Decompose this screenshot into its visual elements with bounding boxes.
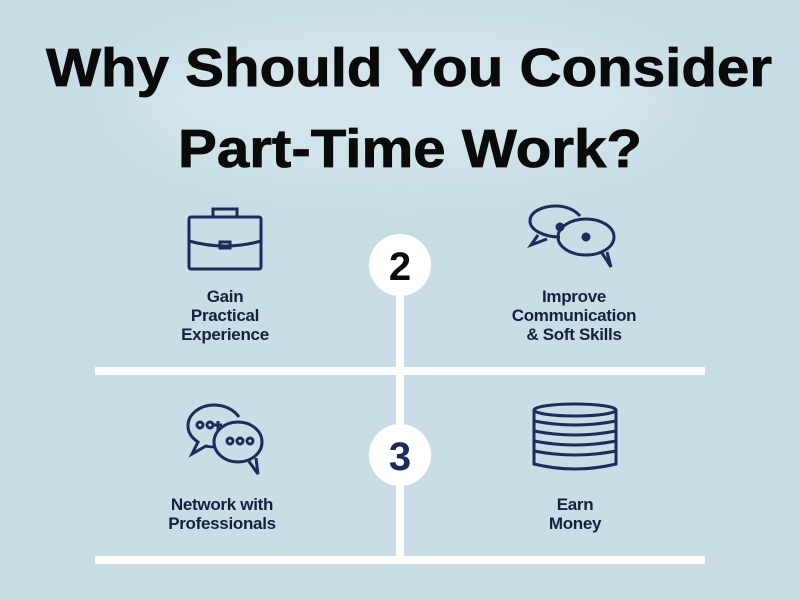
label: improve communication: & Soft Skills [526,325,622,344]
label: earn money [549,495,602,533]
label: network with professionals [168,495,276,533]
label: gain practical experience [181,287,269,344]
label: earn money: Money [549,514,601,533]
number 2: 2 [389,245,411,289]
label: network with professionals: Network with [171,495,273,514]
background glow [120,20,680,180]
number 3 [369,424,431,486]
icon: network chat [186,404,264,475]
label: earn money: Earn [557,495,593,514]
title: Part-Time Work? [178,119,642,179]
label: improve communication: Improve [542,287,606,306]
label: improve communication [512,287,636,344]
icon: chat bubbles [527,204,616,268]
label: improve communication: Communication [512,306,636,325]
number 2 [369,234,431,296]
label: gain practical experience: Practical [191,306,259,325]
label: gain practical experience: Gain [207,287,243,306]
label: network with professionals: Professionals [168,514,276,533]
title [46,38,772,179]
number 3: 3 [389,435,411,479]
title: Why Should You Consider [46,38,772,98]
icon: briefcase [188,208,262,270]
icon: coin stack [532,402,618,470]
label: gain practical experience: Experience [181,325,269,344]
